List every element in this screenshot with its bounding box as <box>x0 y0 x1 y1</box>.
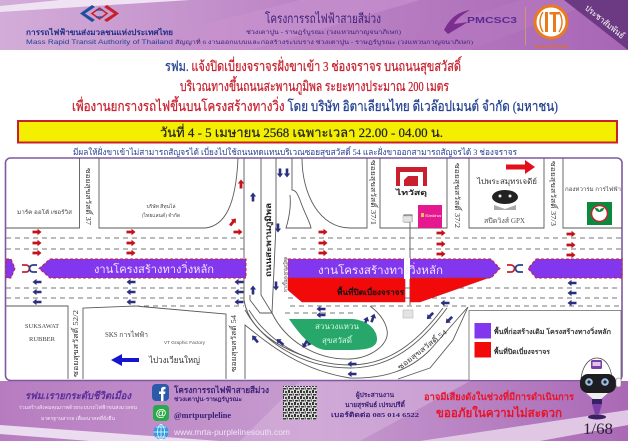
navy traffic arrows <box>32 168 576 377</box>
Mark Auto Service: มาร์ค ออโต้ เซอร์วิส <box>17 208 73 216</box>
slogan block: รฟม.เรายกระดับชีวิตเมือง <box>25 390 132 402</box>
project title: โครงการรถไฟฟ้าสายสีม่วง <box>265 11 381 26</box>
main structure west end <box>6 259 15 278</box>
U-turn markers east <box>507 265 523 272</box>
headline <box>72 56 558 115</box>
Suksawat Rubber <box>25 323 59 343</box>
facebook page text: ช่วงเตาปูน-ราษฎร์บูรณะ <box>174 395 242 404</box>
mascot robot <box>580 358 621 420</box>
soi 37 label: ซอยสุขสวัสดิ์ 37 <box>84 168 94 226</box>
ITD logo <box>525 6 568 49</box>
Phra Samut Chedi label: ไปพระสมุทรเจดีย์ <box>476 177 537 186</box>
pink shop sign: Sinkha <box>425 214 441 218</box>
soi 54 label: ซอยสุขสวัสดิ์ 54 <box>228 314 238 372</box>
icon: at sign <box>153 405 169 421</box>
Thai Watsadu logo <box>395 167 428 197</box>
GPX logo <box>492 190 518 210</box>
Suksawat Rubber: RUBBER <box>29 336 56 343</box>
contact block: เบอร์ติดต่อ 085 014 6522 <box>331 411 419 419</box>
Wongwian Yai label: ไปวงเวียนใหญ่ <box>148 355 200 365</box>
main structure east <box>528 259 622 278</box>
company label <box>142 203 180 219</box>
slogan block: มาตรฐานสากล เพื่ออนาคตที่ยั่งยืน <box>41 415 116 422</box>
soi 52/2 label: ซอยสุขสวัสดิ์ 52/2 <box>70 309 80 377</box>
icon: at sign: @ <box>156 408 167 420</box>
PMCSC3 logo: PMCSC3 <box>467 15 517 25</box>
red traffic arrows <box>32 180 576 258</box>
noise notice: อาจมีเสียงดังในช่วงที่มีการดำเนินการ <box>424 389 575 403</box>
ITD logo: ITALIAN-THAI <box>534 44 568 49</box>
main structure centre: งานโครงสร้างทางวิ่งหลัก <box>318 262 443 277</box>
MRTA name English: Mass Rapid Transit Authority of Thailand <box>26 39 173 46</box>
soi 37/1 label: ซอยสุขสวัสดิ์ 37/1 <box>369 160 379 226</box>
MRTA name Thai: การรถไฟฟ้าขนส่งมวลชนแห่งประเทศไทย <box>26 27 173 37</box>
legend: พื้นที่ก่อสร้างเดิม โครงสร้างทางวิ่งหลัก <box>493 326 611 336</box>
contact block: ผู้ประสานงาน <box>356 390 395 400</box>
PR ribbon <box>564 0 628 50</box>
slogan block <box>19 390 138 422</box>
bulletin number: 1/68 <box>583 421 613 438</box>
ramp label: ทางขึ้นสะพานภูมิพล <box>280 257 289 292</box>
U-turn markers west <box>22 265 37 272</box>
lane dashes <box>6 238 622 313</box>
Suksawat Rubber: SUKSAWAT <box>25 323 59 330</box>
MRTA logo <box>80 5 119 22</box>
company label: บริษัท สีทุนไล่ <box>146 203 176 210</box>
date banner <box>18 121 617 142</box>
Thai Watsadu logo: ไทวัสดุ <box>395 188 428 197</box>
headline line 2: บริเวณทางขึ้นถนนสะพานภูมิพล ระยะทางประมาณ 200 เมตร <box>180 76 449 95</box>
legend: พื้นที่ปิดเบี่ยงจราจร <box>493 346 550 356</box>
closed area red: พื้นที่ปิดเบี่ยงจราจร <box>337 286 405 297</box>
pink shop sign <box>418 205 442 228</box>
soi 54 diagonal label: ซอยสุขสวัสดิ์ 54 <box>395 326 449 372</box>
direction arrow to Wongwian Yai <box>111 354 139 366</box>
company label: (ไทยแลนด์) จำกัด <box>142 212 180 219</box>
contact block <box>331 390 419 419</box>
social handle: @mrtpurpleline <box>174 411 231 420</box>
icon: facebook <box>152 384 169 401</box>
QR code <box>283 386 317 420</box>
main structure west: งานโครงสร้างทางวิ่งหลัก <box>94 261 214 276</box>
Kasikorn bank logo <box>587 202 612 225</box>
slogan block: ร่วมสร้างสังคมคุณภาพด้วยระบบรถไฟฟ้าขนส่งมวลชน <box>19 404 138 411</box>
green park <box>289 319 377 350</box>
contact block: นายสุรพันธ์ เปรมปรีดิ์ <box>345 400 406 409</box>
legend <box>469 310 621 380</box>
footer background <box>0 381 628 441</box>
facebook page text <box>173 385 269 404</box>
contract line: สัญญาที่ 6 งานออกแบบและก่อสร้างระบบราง ช่วงเตาปูน - ราษฎร์บูรณะ (วงแหวนกาญจนาภิเษก) <box>175 38 473 46</box>
impact note: มีผลให้ฝั่งขาเข้าไม่สามารถสัญจรได้ เบี่ยงไปใช้ถนนทดแทนบริเวณซอยสุขสวัสดิ์ 54 และฝั่งขาออกสามารถสัญจรได้ 3 ช่องจราจร <box>73 146 517 158</box>
main structure west <box>39 259 246 278</box>
soi 37/3 label: ซอยสุขสวัสดิ์ 37/3 <box>549 161 559 227</box>
direction arrow to Phra Samut Chedi <box>506 160 535 174</box>
website: www.mrta-purplelinesouth.com <box>173 427 290 437</box>
project section: ช่วงเตาปูน - ราษฎร์บูรณะ (วงแหวนกาญจนาภิเษก) <box>246 28 401 36</box>
traffic map <box>6 158 622 380</box>
PMCSC3 logo <box>444 10 517 34</box>
date banner: วันที่ 4 - 5 เมษายน 2568 เฉพาะเวลา 22.00 - 04.00 น. <box>160 124 443 140</box>
VT Graphic Factory: VT Graphic Factory <box>164 340 206 345</box>
SKS label: SKS การไฟฟ้า <box>105 330 148 339</box>
icon: globe <box>154 424 168 440</box>
road label Bhumibol bridge: ถนนสะพานภูมิพล <box>264 202 274 277</box>
headline line 1: รฟม. แจ้งปิดเบี่ยงจราจรฝั่งขาเข้า 3 ช่องจราจร บนถนนสุขสวัสดิ์ <box>165 56 462 75</box>
headline line 3: เพื่องานยกรางรถไฟขึ้นบนโครงสร้างทางวิ่ง โดย บริษัท อิตาเลียนไทย ดีเวล๊อปเมนต์ จำกัด (มหาชน) <box>72 96 558 115</box>
apology: ขออภัยในความไม่สะดวก <box>436 405 562 420</box>
buildings and road edges <box>6 158 622 379</box>
soi 37/2 label: ซอยสุขสวัสดิ์ 37/2 <box>453 163 463 229</box>
green park: สวนวงแหวน <box>315 322 359 331</box>
main structure centre <box>288 258 500 279</box>
green park: สุขสวัสดิ์ <box>322 335 354 345</box>
header banner <box>0 0 628 50</box>
facebook page text: โครงการรถไฟฟ้าสายสีม่วง <box>173 385 269 395</box>
GPX label: สปีดวิงส์ GPX <box>484 217 525 225</box>
electricity label: กองทวารม การไฟฟ้า <box>565 186 621 193</box>
closed area red <box>288 278 488 302</box>
